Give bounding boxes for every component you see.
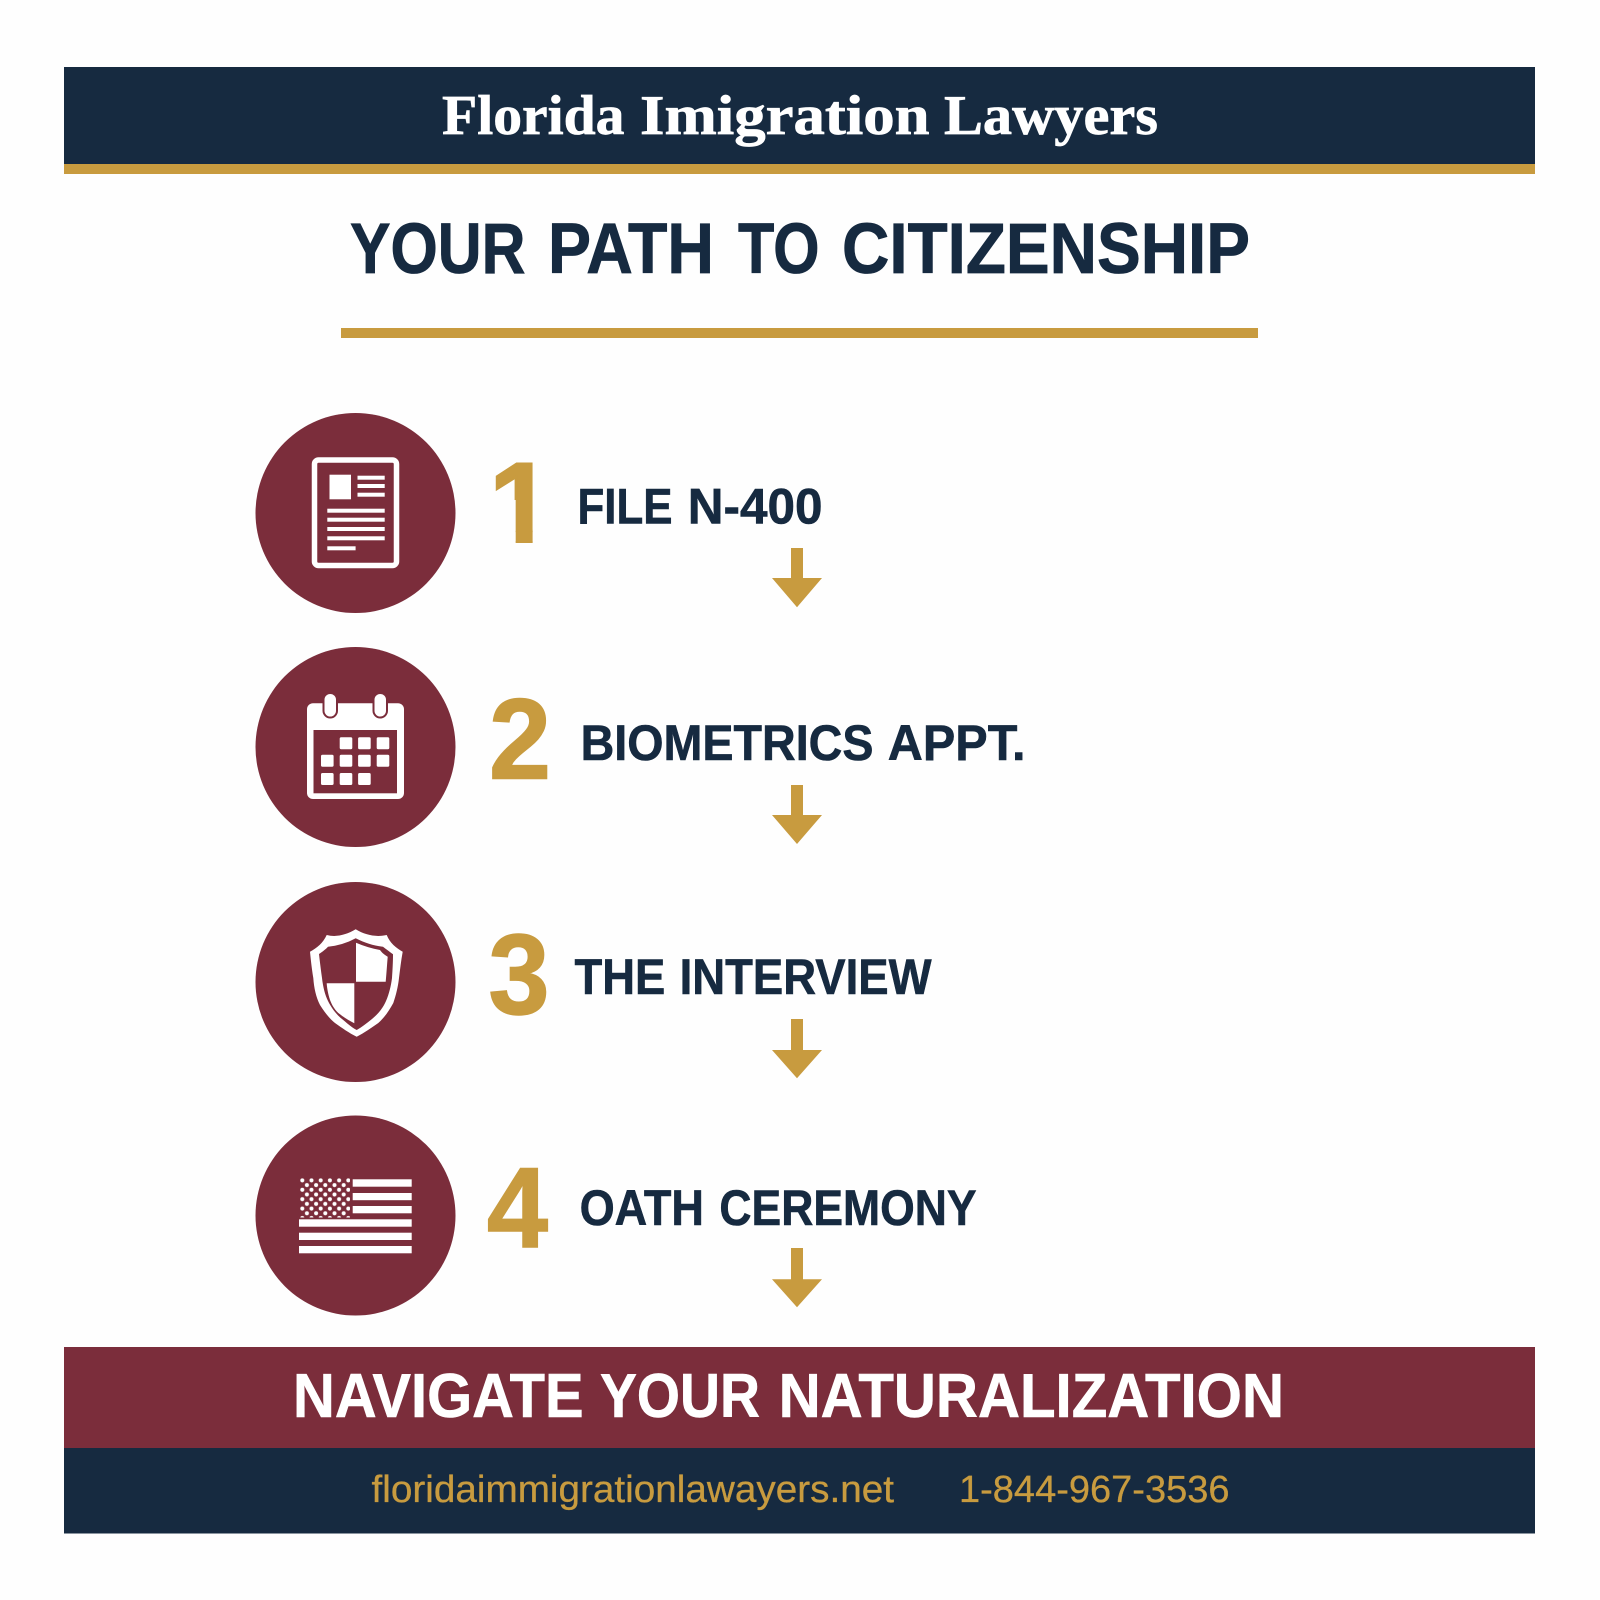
arrow bbox=[772, 785, 822, 844]
title: TO bbox=[738, 210, 820, 289]
step 2 bbox=[256, 647, 1026, 847]
step label: BIOMETRICS bbox=[581, 715, 874, 771]
phone: 1-844-967-3536 bbox=[959, 1469, 1230, 1511]
title bbox=[350, 210, 1250, 289]
icon: flag bbox=[256, 1116, 456, 1316]
call to action text: NATURALIZATION bbox=[779, 1362, 1284, 1431]
step number 2: 2 bbox=[489, 676, 551, 804]
step label: APPT. bbox=[888, 715, 1026, 771]
title: CITIZENSHIP bbox=[842, 210, 1250, 289]
arrow bbox=[772, 1248, 822, 1307]
step number 3: 3 bbox=[488, 912, 550, 1038]
icon: shield bbox=[256, 882, 456, 1082]
title: PATH bbox=[548, 210, 714, 289]
firm name: Lawyers bbox=[944, 85, 1158, 147]
title: YOUR bbox=[350, 210, 526, 289]
step label bbox=[580, 1180, 977, 1236]
call to action banner bbox=[64, 1347, 1535, 1448]
step label bbox=[578, 478, 822, 534]
step label: CEREMONY bbox=[719, 1180, 977, 1236]
arrow bbox=[772, 1019, 822, 1078]
step label: INTERVIEW bbox=[680, 949, 932, 1005]
step number 4: 4 bbox=[487, 1145, 548, 1272]
firm name bbox=[442, 85, 1158, 147]
firm name: Imigration bbox=[640, 85, 930, 147]
website: floridaimmigrationlawayers.net bbox=[372, 1469, 894, 1511]
step 1 bbox=[256, 413, 822, 613]
step label: FILE bbox=[578, 478, 672, 534]
header banner bbox=[64, 67, 1535, 174]
call to action text: NAVIGATE bbox=[293, 1362, 584, 1431]
step label: OATH bbox=[580, 1180, 704, 1236]
firm name: Florida bbox=[442, 85, 624, 147]
contact bar bbox=[64, 1448, 1535, 1534]
step label bbox=[574, 949, 932, 1005]
icon: calendar bbox=[256, 647, 456, 847]
icon: document bbox=[256, 413, 456, 613]
step label: THE bbox=[574, 949, 665, 1005]
step 3 bbox=[256, 882, 932, 1082]
step label: N-400 bbox=[688, 478, 822, 534]
call to action text: YOUR bbox=[600, 1362, 760, 1431]
call to action text bbox=[293, 1362, 1284, 1431]
step number 1: 1 bbox=[489, 440, 553, 568]
arrow bbox=[772, 548, 822, 607]
step 4 bbox=[256, 1116, 977, 1316]
title underline bbox=[341, 328, 1258, 338]
